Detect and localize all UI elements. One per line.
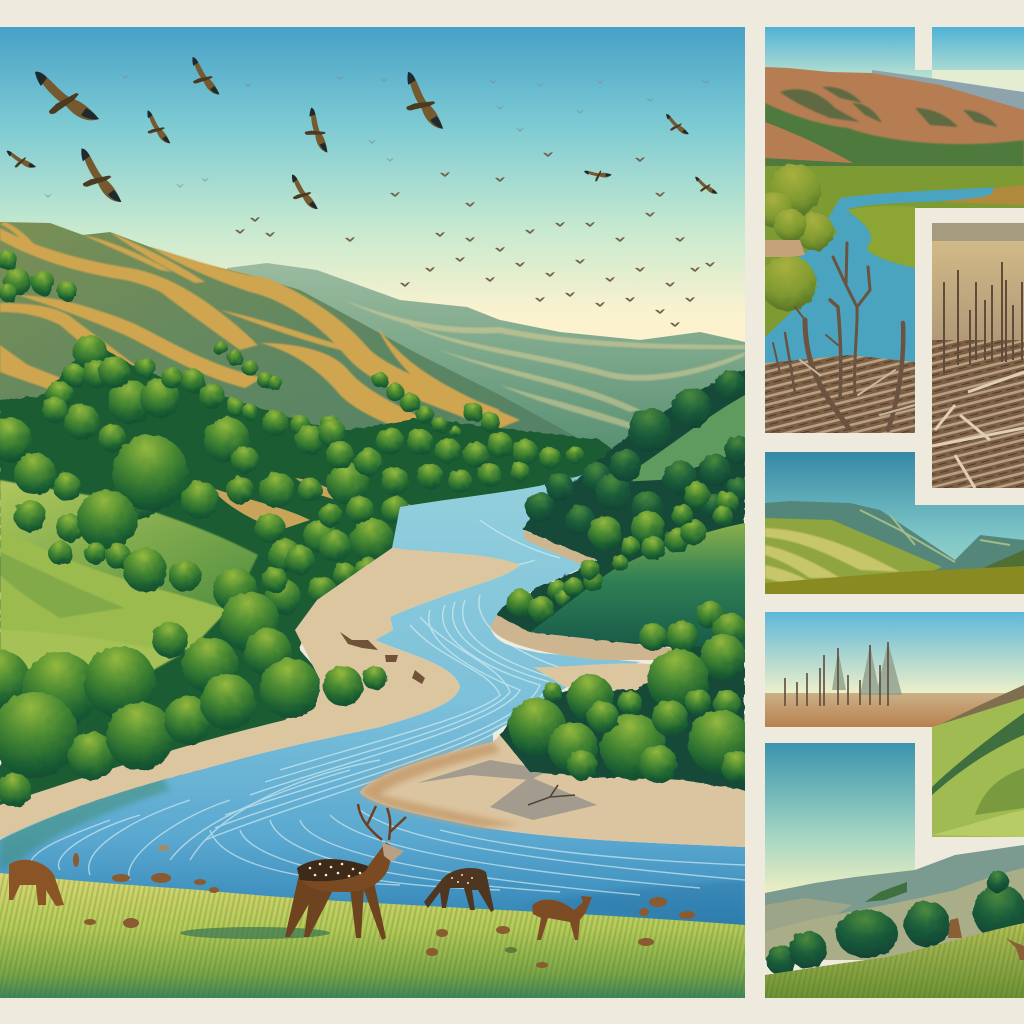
left forest base [0, 340, 640, 830]
riverside trees [757, 164, 834, 311]
valley floor [765, 166, 1024, 433]
dead trees [773, 243, 915, 430]
small tan foothills [210, 478, 352, 530]
plain [932, 223, 1024, 363]
blue ridges [765, 501, 1024, 580]
river [0, 475, 745, 930]
sky [765, 743, 915, 903]
lower right beach [360, 735, 745, 847]
panel: bright green slope [932, 698, 1024, 837]
upper forest clusters [0, 250, 584, 519]
deer on the beach [340, 632, 425, 684]
barren ground [765, 693, 1024, 727]
golden rolling hills [0, 222, 640, 500]
lower right shrubs [508, 601, 753, 783]
panel: bottom meadow landscape [765, 743, 1024, 998]
terracotta lower flank [765, 122, 853, 163]
right forest base [497, 370, 745, 790]
flock of small birds [44, 75, 715, 327]
grassy islands [847, 206, 915, 268]
river [765, 187, 995, 433]
trees [766, 871, 1024, 975]
far right hill [985, 550, 1024, 575]
tree peninsula [396, 503, 481, 540]
bottom light fold [932, 810, 1024, 837]
hill flank shading [780, 87, 998, 127]
pale hills [765, 868, 1024, 960]
dead wood pile [765, 355, 915, 433]
dead trunks [944, 262, 1022, 375]
driftwood [528, 785, 575, 805]
pale horizon [932, 70, 1024, 90]
ridge light lines [860, 510, 1010, 562]
panel: river, ochre hills and dead trees [765, 27, 1024, 433]
panel: deforested inset [932, 223, 1024, 488]
inset frame [915, 208, 1024, 505]
meadow shadow [180, 927, 330, 939]
large stag [285, 804, 406, 940]
pale sky behind treeline [915, 743, 1024, 873]
panel: green hills [765, 452, 1024, 594]
treeline hills [765, 845, 1024, 960]
centre grazing deer [424, 868, 494, 912]
right deer [532, 896, 592, 940]
large birds [7, 57, 718, 210]
sky [0, 27, 745, 352]
panel: dead forest plain [765, 612, 1024, 727]
upper right green hill [615, 395, 745, 482]
bright hills [765, 518, 942, 585]
top gap between sky panels [915, 27, 932, 70]
panel: main valley landscape [0, 27, 745, 998]
dark forest on right bank [525, 370, 752, 535]
fallen logs [932, 372, 1024, 488]
middle forest [14, 490, 409, 626]
distant ridge highlights [343, 300, 745, 432]
left pale hill [765, 898, 852, 940]
large right hill [530, 523, 745, 650]
beach tone near waterline [360, 742, 520, 827]
left beach [0, 548, 520, 838]
sky [765, 27, 1024, 87]
fir boughs [832, 642, 902, 695]
debris ground [932, 340, 1024, 488]
dark wooded strip [932, 713, 1024, 795]
small distant animals [73, 845, 695, 968]
bare trees [785, 642, 888, 706]
meadow [765, 923, 1024, 998]
ochre hills [765, 67, 1024, 180]
lower left forest [0, 592, 387, 807]
distant blue mountains [227, 263, 745, 480]
hill base [932, 698, 1024, 837]
upper right sand bars [490, 530, 672, 695]
lower shaded fold [975, 768, 1024, 815]
sky [765, 612, 1024, 694]
bank sand [765, 240, 805, 257]
sky [765, 452, 1024, 594]
horizon band [932, 223, 1024, 241]
foreground meadow [0, 873, 745, 998]
foreground field [765, 566, 1024, 594]
small deer [948, 918, 1024, 960]
bright shrubs on right bank [506, 482, 738, 622]
left green grassy hills [0, 480, 258, 700]
wooded lower slope [765, 103, 1024, 170]
meadow blades [765, 923, 1024, 998]
distant blue ridge [872, 70, 1024, 120]
far right field [943, 185, 1024, 205]
wooded slope edge [935, 685, 1024, 727]
beach shadows [417, 760, 597, 820]
small dark trees [865, 882, 907, 902]
left grazing deer [9, 860, 64, 906]
hill highlights [765, 528, 900, 582]
